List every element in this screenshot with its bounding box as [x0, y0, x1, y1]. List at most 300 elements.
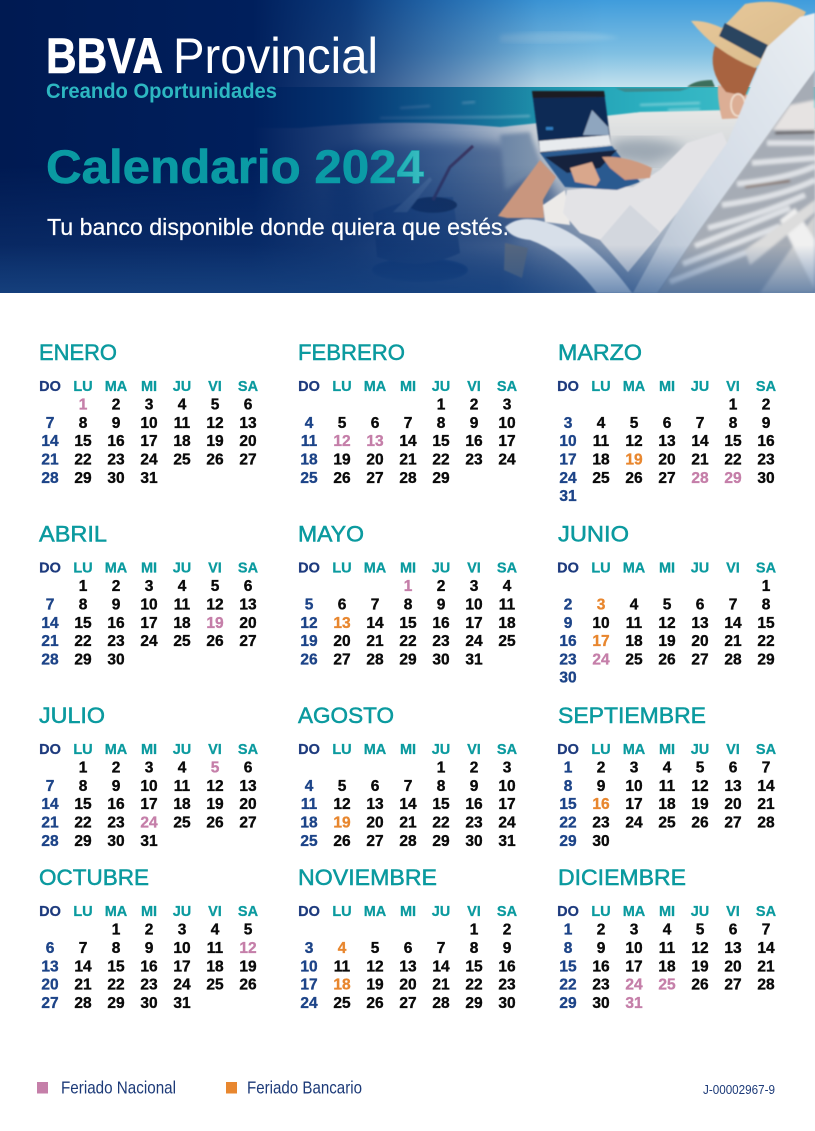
dates: 10 — [625, 940, 643, 957]
weekday header: SA — [238, 904, 259, 920]
dates: 13 — [724, 778, 742, 795]
weekday header: LU — [591, 742, 611, 758]
dates: 15 — [757, 615, 775, 632]
dates: 11 — [207, 940, 224, 957]
dates: 29 — [432, 833, 450, 850]
dates: 25 — [658, 814, 676, 832]
dates — [559, 922, 775, 1012]
dates: 21 — [691, 452, 709, 468]
dates: 16 — [465, 433, 483, 450]
dates: 12 — [691, 778, 709, 795]
dates: 10 — [465, 596, 483, 613]
month heading: noviembre: NOVIEMBRE — [298, 865, 437, 890]
dates: 14 — [41, 615, 59, 632]
dates: 8 — [79, 778, 88, 795]
dates: 2 — [470, 760, 478, 776]
dates: 31 — [498, 833, 516, 850]
dates — [41, 578, 257, 668]
dates: 3 — [630, 760, 639, 776]
dates: 16 — [107, 615, 125, 632]
dates: 5 — [244, 922, 253, 939]
dates: 18 — [173, 433, 191, 450]
dates: 12 — [206, 415, 224, 432]
panel: julio — [39, 703, 259, 850]
dates: 5 — [371, 940, 380, 957]
dates: 11 — [174, 596, 191, 613]
dates: 28 — [757, 814, 775, 832]
panel: agosto — [298, 703, 518, 850]
month heading: enero: ENERO — [39, 340, 117, 365]
dates: 8 — [79, 415, 88, 432]
weekday header: SA — [756, 561, 777, 577]
weekday header: DO — [557, 561, 579, 577]
dates: 6 — [338, 596, 347, 613]
dates: 13 — [658, 433, 676, 450]
dates: 6 — [404, 940, 413, 957]
weekday header: MA — [623, 904, 646, 920]
weekday header: SA — [756, 742, 777, 758]
month heading: mayo: MAYO — [298, 522, 364, 547]
dates: 15 — [432, 796, 450, 813]
dates: 17 — [465, 615, 483, 632]
dates — [559, 396, 775, 505]
panel: abril — [39, 522, 259, 668]
dates: 17 — [559, 452, 577, 468]
dates: 7 — [762, 760, 770, 776]
month heading: junio: JUNIO — [558, 522, 629, 547]
dates: 23 — [592, 977, 610, 994]
weekday header: LU — [73, 742, 93, 758]
dates: 27 — [724, 814, 742, 832]
logo: BBVA Provincial: BBVA — [46, 28, 163, 84]
dates: 30 — [107, 833, 125, 850]
dates: 28 — [399, 833, 417, 850]
weekday header: SA — [497, 379, 518, 395]
dates: 13 — [239, 778, 257, 795]
dates: 4 — [338, 940, 347, 957]
panel: diciembre — [557, 865, 777, 1012]
dates: 30 — [559, 670, 577, 687]
dates: 26 — [366, 995, 384, 1012]
weekday header: MI — [141, 379, 157, 395]
dates: 22 — [465, 977, 483, 994]
dates: 19 — [658, 633, 676, 650]
dates: 29 — [757, 651, 775, 668]
dates: 5 — [211, 578, 220, 595]
month heading: marzo: MARZO — [558, 340, 642, 365]
weekday header: MA — [364, 742, 387, 758]
dates: 23 — [140, 977, 158, 994]
weekday header: MA — [364, 561, 387, 577]
dates: 9 — [112, 778, 121, 795]
dates: 17 — [498, 796, 516, 813]
dates: 21 — [399, 452, 417, 468]
weekday header: DO — [557, 379, 579, 395]
dates: 15 — [74, 433, 92, 450]
weekday header: MI — [400, 379, 416, 395]
dates: 26 — [333, 833, 351, 850]
dates: 15 — [465, 958, 483, 975]
dates: 27 — [41, 995, 59, 1012]
dates: 6 — [729, 760, 738, 776]
dates: 16 — [498, 958, 516, 975]
dates: 18 — [300, 452, 318, 468]
dates: 2 — [112, 578, 120, 595]
dates: 22 — [107, 977, 125, 994]
dates: 12 — [658, 615, 676, 632]
weekday header: VI — [467, 904, 481, 920]
dates: 30 — [432, 651, 450, 668]
weekday header: DO — [298, 561, 320, 577]
dates: 26 — [691, 977, 709, 994]
dates: 18 — [658, 796, 676, 813]
dates: 7 — [696, 415, 704, 432]
dates: 29 — [559, 833, 577, 850]
weekday header: DO — [298, 904, 320, 920]
dates: 14 — [74, 958, 92, 975]
dates: 19 — [625, 452, 643, 468]
dates: 31 — [465, 651, 483, 668]
weekday header: DO — [557, 742, 579, 758]
dates: 17 — [300, 977, 318, 994]
dates: 3 — [145, 760, 154, 776]
dates: 8 — [470, 940, 479, 957]
dates: 9 — [145, 940, 154, 957]
dates: 18 — [592, 452, 610, 468]
dates: 12 — [239, 940, 257, 957]
dates: 19 — [691, 796, 709, 813]
dates: 11 — [174, 415, 191, 432]
dates: 28 — [41, 470, 59, 487]
dates: 31 — [140, 833, 158, 850]
dates: 24 — [625, 977, 643, 994]
dates: 14 — [399, 796, 417, 813]
dates: 8 — [112, 940, 121, 957]
dates: 4 — [630, 596, 639, 613]
dates: 5 — [211, 396, 220, 414]
dates: 23 — [107, 452, 125, 468]
dates: 29 — [74, 651, 92, 668]
hat — [691, 2, 806, 68]
weekday header: LU — [591, 904, 611, 920]
dates: 29 — [399, 651, 417, 668]
legend: feriado nacional: Feriado Nacional — [61, 1078, 176, 1098]
dates — [559, 760, 775, 850]
weekday header: JU — [432, 904, 450, 920]
dates: 4 — [305, 415, 314, 432]
dates: 10 — [592, 615, 610, 632]
decorative overlay — [0, 0, 574, 293]
dates: 27 — [239, 633, 257, 650]
weekday header: LU — [591, 379, 611, 395]
dates: 19 — [206, 796, 224, 813]
dates: 27 — [724, 977, 742, 994]
month heading: septiembre: SEPTIEMBRE — [558, 703, 706, 728]
dates: 14 — [399, 433, 417, 450]
dates: 30 — [498, 995, 516, 1012]
dates: 23 — [592, 814, 610, 832]
dates: 21 — [366, 633, 384, 650]
dates: 15 — [107, 958, 125, 975]
dates: 18 — [173, 796, 191, 813]
weekday header: JU — [691, 379, 709, 395]
weekday header: VI — [726, 742, 740, 758]
dates: 12 — [691, 940, 709, 957]
dates: 3 — [503, 760, 512, 776]
dates: 26 — [206, 814, 224, 832]
dress — [543, 190, 570, 225]
dates: 9 — [597, 778, 606, 795]
weekday header: MI — [141, 904, 157, 920]
dates: 26 — [333, 470, 351, 487]
dates: 23 — [559, 651, 577, 668]
weekday header: LU — [73, 904, 93, 920]
dates: 23 — [465, 452, 483, 468]
dates: 9 — [503, 940, 512, 957]
dates: 3 — [145, 578, 154, 595]
dates: 9 — [112, 596, 121, 613]
dates: 8 — [404, 596, 413, 613]
dates: 12 — [366, 958, 384, 975]
weekday header: JU — [691, 904, 709, 920]
dates: 17 — [140, 615, 158, 632]
dates: 16 — [465, 796, 483, 813]
dates: 17 — [173, 958, 191, 975]
dates: 21 — [74, 977, 92, 994]
dates: 13 — [333, 615, 351, 632]
dates: 10 — [498, 415, 516, 432]
dates: 15 — [432, 433, 450, 450]
dates: 2 — [762, 396, 770, 414]
weekday header: LU — [332, 379, 352, 395]
dates: 4 — [178, 760, 187, 776]
dates: 20 — [658, 452, 676, 468]
dates: 29 — [74, 833, 92, 850]
leg — [498, 160, 556, 218]
dates: 2 — [112, 760, 120, 776]
dates: 12 — [206, 596, 224, 613]
dates: 9 — [597, 940, 606, 957]
dates: 26 — [691, 814, 709, 832]
dates: 18 — [498, 615, 516, 632]
dates: 20 — [239, 615, 257, 632]
dates: 30 — [592, 833, 610, 850]
dates: 13 — [724, 940, 742, 957]
month heading: abril: ABRIL — [39, 522, 107, 547]
dates: 25 — [173, 633, 191, 650]
dates: 6 — [244, 578, 253, 595]
month heading: octubre: OCTUBRE — [39, 865, 149, 890]
dates: 2 — [437, 578, 445, 595]
dates: 22 — [559, 814, 577, 832]
dates: 27 — [399, 995, 417, 1012]
dates: 14 — [41, 433, 59, 450]
dates: 9 — [564, 615, 573, 632]
weekday header: JU — [173, 379, 191, 395]
dates: 17 — [625, 958, 643, 975]
dates: 20 — [724, 796, 742, 813]
weekday header: VI — [726, 904, 740, 920]
dates: 13 — [399, 958, 417, 975]
dates: 28 — [724, 651, 742, 668]
dates: 23 — [107, 814, 125, 832]
dates: 17 — [140, 796, 158, 813]
dates: 20 — [366, 452, 384, 468]
dates: 24 — [498, 452, 516, 468]
dates: 4 — [503, 578, 512, 595]
dates: 23 — [107, 633, 125, 650]
subtitle: Tu banco disponible donde quiera que estés. — [47, 214, 509, 240]
panel: octubre — [39, 865, 259, 1012]
logo: BBVA Provincial — [46, 28, 378, 84]
dates: 13 — [239, 596, 257, 613]
company tax id: J-00002967-9 — [703, 1083, 775, 1097]
dates: 18 — [625, 633, 643, 650]
logo: BBVA Provincial: Provincial — [173, 28, 378, 84]
dates: 8 — [437, 415, 446, 432]
dates: 14 — [41, 796, 59, 813]
weekday header: VI — [726, 561, 740, 577]
weekday header: MI — [400, 742, 416, 758]
striped chair back — [657, 60, 815, 293]
dates: 15 — [559, 796, 577, 813]
dates: 1 — [470, 922, 479, 939]
dates: 18 — [173, 615, 191, 632]
weekday header: VI — [726, 379, 740, 395]
dates: 24 — [465, 633, 483, 650]
dates: 4 — [305, 778, 314, 795]
dates: 27 — [239, 452, 257, 468]
dates: 11 — [301, 433, 318, 450]
dates: 15 — [399, 615, 417, 632]
decorative overlay — [0, 177, 662, 293]
dates: 28 — [41, 833, 59, 850]
dates: 3 — [305, 940, 314, 957]
dates: 28 — [74, 995, 92, 1012]
dates: 26 — [300, 651, 318, 668]
dates: 10 — [140, 596, 158, 613]
month heading: agosto: AGOSTO — [298, 703, 394, 728]
weekday header: SA — [497, 742, 518, 758]
dates: 20 — [366, 814, 384, 832]
dates: 11 — [499, 596, 516, 613]
dates: 6 — [371, 415, 380, 432]
dates: 3 — [564, 415, 573, 432]
dates: 15 — [724, 433, 742, 450]
dates: 2 — [503, 922, 511, 939]
dates: 25 — [333, 995, 351, 1012]
dates: 28 — [366, 651, 384, 668]
dates: 27 — [658, 470, 676, 487]
dates: 16 — [757, 433, 775, 450]
weekday header: MA — [623, 379, 646, 395]
dates: 11 — [301, 796, 318, 813]
weekday header: VI — [208, 379, 222, 395]
weekday header: VI — [208, 742, 222, 758]
dates: 14 — [432, 958, 450, 975]
dates — [41, 922, 257, 1012]
dates: 7 — [729, 596, 737, 613]
weekday header: DO — [39, 379, 61, 395]
dates: 1 — [437, 760, 446, 776]
dates: 9 — [762, 415, 771, 432]
dates: 22 — [74, 633, 92, 650]
dates: 31 — [140, 470, 158, 487]
dates: 13 — [41, 958, 59, 975]
weekday header: MI — [659, 379, 675, 395]
dates: 22 — [74, 452, 92, 468]
dates: 24 — [173, 977, 191, 994]
dates: 9 — [470, 415, 479, 432]
dates: 11 — [334, 958, 351, 975]
dates: 27 — [333, 651, 351, 668]
dates: 29 — [107, 995, 125, 1012]
dates: 26 — [239, 977, 257, 994]
dates: 6 — [663, 415, 672, 432]
weekday header: MA — [105, 379, 128, 395]
weekday header: LU — [332, 904, 352, 920]
dates: 8 — [729, 415, 738, 432]
dates: 18 — [300, 814, 318, 832]
dates: 13 — [239, 415, 257, 432]
weekday header: MA — [364, 904, 387, 920]
dates: 28 — [691, 470, 709, 487]
dates: 1 — [112, 922, 121, 939]
dates: 28 — [757, 977, 775, 994]
dates: 4 — [178, 396, 187, 414]
weekday header: JU — [432, 379, 450, 395]
dates: 5 — [211, 760, 220, 776]
dates: 27 — [366, 833, 384, 850]
weekday header: MA — [105, 561, 128, 577]
weekday header: DO — [557, 904, 579, 920]
dates: 2 — [597, 760, 605, 776]
dates: 16 — [559, 633, 577, 650]
weekday header: DO — [39, 904, 61, 920]
dates: 11 — [174, 778, 191, 795]
dates: 24 — [592, 651, 610, 668]
dates: 1 — [79, 396, 88, 414]
dates: 16 — [107, 433, 125, 450]
dates — [300, 578, 516, 668]
dates: 10 — [173, 940, 191, 957]
dates: 10 — [498, 778, 516, 795]
dates: 1 — [564, 760, 573, 776]
dates: 2 — [470, 396, 478, 414]
dates: 10 — [140, 778, 158, 795]
panel: mayo — [298, 522, 518, 668]
dates: 7 — [371, 596, 379, 613]
dates: 31 — [559, 488, 577, 505]
dates: 9 — [112, 415, 121, 432]
dates: 29 — [465, 995, 483, 1012]
panel: junio — [557, 522, 777, 687]
weekday header: VI — [467, 561, 481, 577]
dates: 25 — [300, 470, 318, 487]
dates: 2 — [564, 596, 572, 613]
dates: 25 — [173, 814, 191, 832]
dates: 8 — [762, 596, 771, 613]
shirt — [563, 132, 727, 272]
dates: 18 — [333, 977, 351, 994]
dates: 22 — [432, 814, 450, 832]
decorative overlay — [0, 245, 815, 293]
dates: 14 — [757, 778, 775, 795]
dates: 8 — [79, 596, 88, 613]
weekday header: LU — [332, 742, 352, 758]
dates: 1 — [564, 922, 573, 939]
dates: 16 — [592, 958, 610, 975]
